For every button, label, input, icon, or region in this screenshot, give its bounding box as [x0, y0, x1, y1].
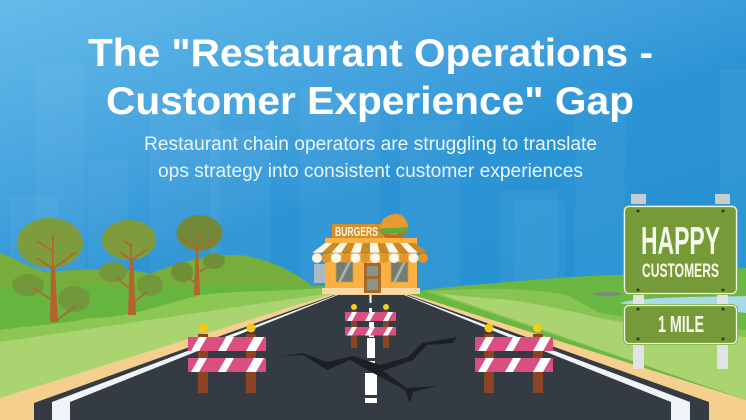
barricade left: [188, 324, 266, 393]
base: [322, 288, 420, 294]
side bin: [314, 264, 326, 283]
left window: [336, 262, 353, 282]
right window: [391, 262, 408, 282]
distance panel: [623, 304, 738, 345]
restaurant building: BURGERS: [335, 224, 378, 239]
hills: [0, 253, 746, 400]
restaurant building: [312, 214, 428, 294]
tree 2: [99, 220, 163, 315]
main panel: [623, 205, 738, 295]
facade: [325, 238, 417, 288]
title: [88, 32, 653, 123]
tree 1: [12, 218, 90, 322]
burger icon: [378, 214, 409, 238]
subtitle: Restaurant chain operators are struggling to translate: [144, 134, 597, 155]
road sign: happy customers: [623, 194, 738, 369]
tree 3: [171, 215, 225, 295]
subtitle: ops strategy into consistent customer experiences: [158, 161, 583, 182]
sign posts: [633, 295, 728, 369]
road edge lines: [52, 295, 690, 420]
road shoulder: [0, 294, 746, 420]
distance text: 1 MILE: [658, 311, 704, 337]
road crack: [282, 337, 457, 403]
door: [364, 263, 381, 293]
sign post caps: [631, 194, 730, 204]
title: Customer Experience" Gap: [106, 80, 634, 123]
burgers sign: [332, 224, 398, 238]
rock on the hillside: [593, 292, 621, 296]
barricade centre: [345, 304, 396, 348]
barricade right: [475, 324, 553, 393]
subtitle: [144, 134, 597, 182]
road centre dashes: [365, 295, 377, 403]
title: The "Restaurant Operations -: [88, 32, 653, 75]
pond behind the sign: [620, 296, 746, 313]
faint city skyline: [10, 65, 746, 290]
awning: [312, 243, 428, 263]
asphalt road: [34, 295, 709, 420]
sign bolts: [636, 210, 724, 340]
